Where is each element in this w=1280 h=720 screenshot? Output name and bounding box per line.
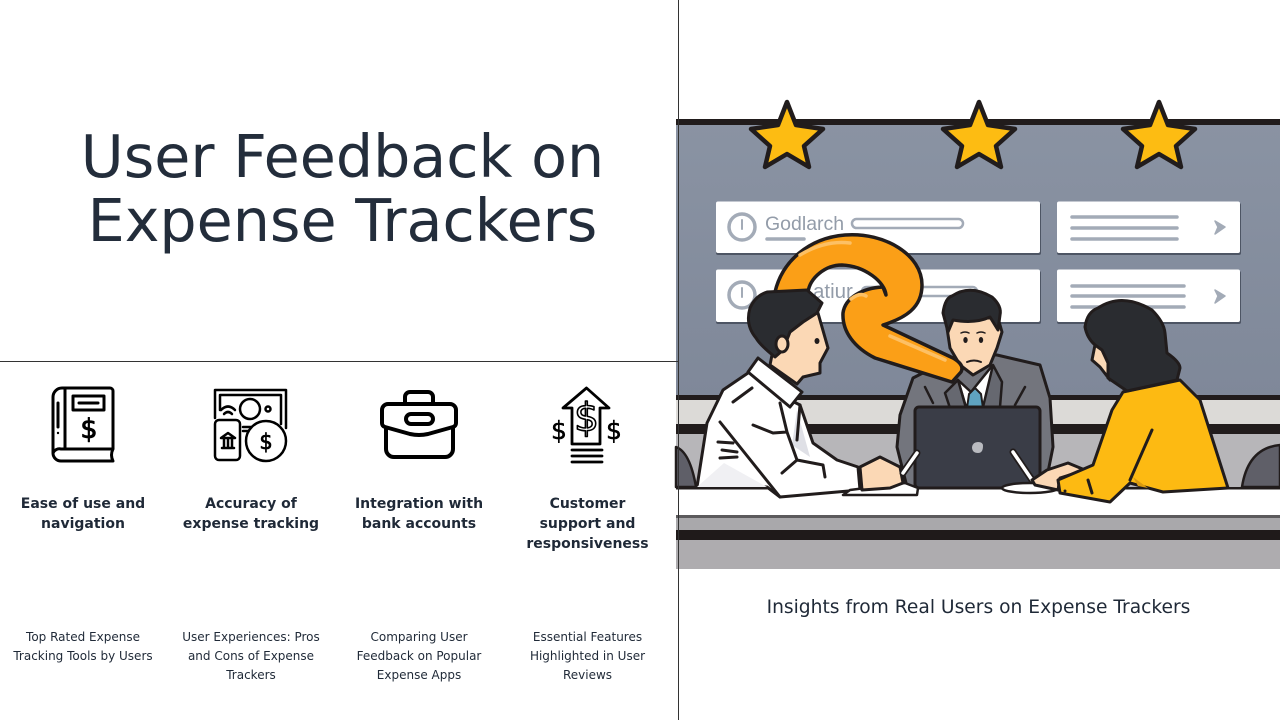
heading: ease of use: Ease of use and bbox=[21, 496, 145, 512]
text: essential features bbox=[530, 630, 646, 682]
heading: accuracy bbox=[183, 496, 319, 532]
icon: arrow up with dollar signs: $ bbox=[551, 416, 567, 445]
text: top rated tools bbox=[13, 630, 153, 663]
star ratings bbox=[751, 102, 1195, 167]
text: essential features: Essential Features bbox=[533, 630, 642, 644]
heading: integration: Integration with bbox=[355, 496, 483, 512]
heading: ease of use bbox=[21, 496, 145, 532]
right person in yellow top bbox=[1002, 300, 1228, 502]
text: comparing feedback bbox=[357, 630, 482, 682]
icon: arrow up with dollar signs: $ bbox=[574, 396, 599, 441]
icon: banknote, phone and coin: $ bbox=[259, 430, 273, 454]
title: Expense Trackers bbox=[88, 186, 597, 254]
icon: banknote, phone and coin bbox=[215, 390, 286, 461]
review cards: Godlarch bbox=[765, 213, 844, 235]
heading: accuracy: expense tracking bbox=[183, 516, 319, 532]
review cards: atiur bbox=[813, 280, 853, 303]
text: top rated tools: Tracking Tools by Users bbox=[13, 649, 153, 663]
title: User Feedback on bbox=[81, 123, 604, 191]
heading: integration: bank accounts bbox=[362, 516, 476, 532]
heading: ease of use: navigation bbox=[41, 516, 125, 532]
heading: customer support: responsiveness bbox=[526, 536, 649, 552]
title bbox=[81, 123, 604, 254]
orange question mark bbox=[775, 235, 962, 382]
heading: integration bbox=[355, 496, 483, 532]
text: comparing feedback: Expense Apps bbox=[377, 668, 461, 682]
text: comparing feedback: Feedback on Popular bbox=[357, 649, 481, 663]
text: top rated tools: Top Rated Expense bbox=[26, 630, 140, 644]
text: essential features: Reviews bbox=[563, 668, 612, 682]
review cards bbox=[716, 202, 1241, 324]
text: user experiences: User Experiences: Pros bbox=[182, 630, 320, 644]
icon: ledger book with dollar: $ bbox=[80, 414, 98, 445]
icon: ledger book with dollar bbox=[53, 388, 113, 461]
icon: briefcase bbox=[382, 392, 456, 457]
left person in white shirt bbox=[697, 290, 918, 497]
text: comparing feedback: Comparing User bbox=[370, 630, 468, 644]
icon: arrow up with dollar signs bbox=[551, 388, 622, 462]
icon: arrow up with dollar signs: $ bbox=[606, 416, 622, 445]
center person in suit bbox=[897, 290, 1053, 488]
text: user experiences: Trackers bbox=[226, 668, 276, 682]
illustration: users reviewing feedback bbox=[676, 102, 1280, 569]
heading: customer support: Customer bbox=[550, 496, 625, 512]
image caption: Insights from Real Users on Expense Trackers bbox=[767, 597, 1190, 618]
heading: accuracy: Accuracy of bbox=[205, 496, 297, 512]
text: user experiences: and Cons of Expense bbox=[188, 649, 314, 663]
text: essential features: Highlighted in User bbox=[530, 649, 645, 663]
heading: customer support: support and bbox=[540, 516, 635, 532]
heading: customer support bbox=[526, 496, 649, 552]
text: user experiences bbox=[182, 630, 320, 682]
